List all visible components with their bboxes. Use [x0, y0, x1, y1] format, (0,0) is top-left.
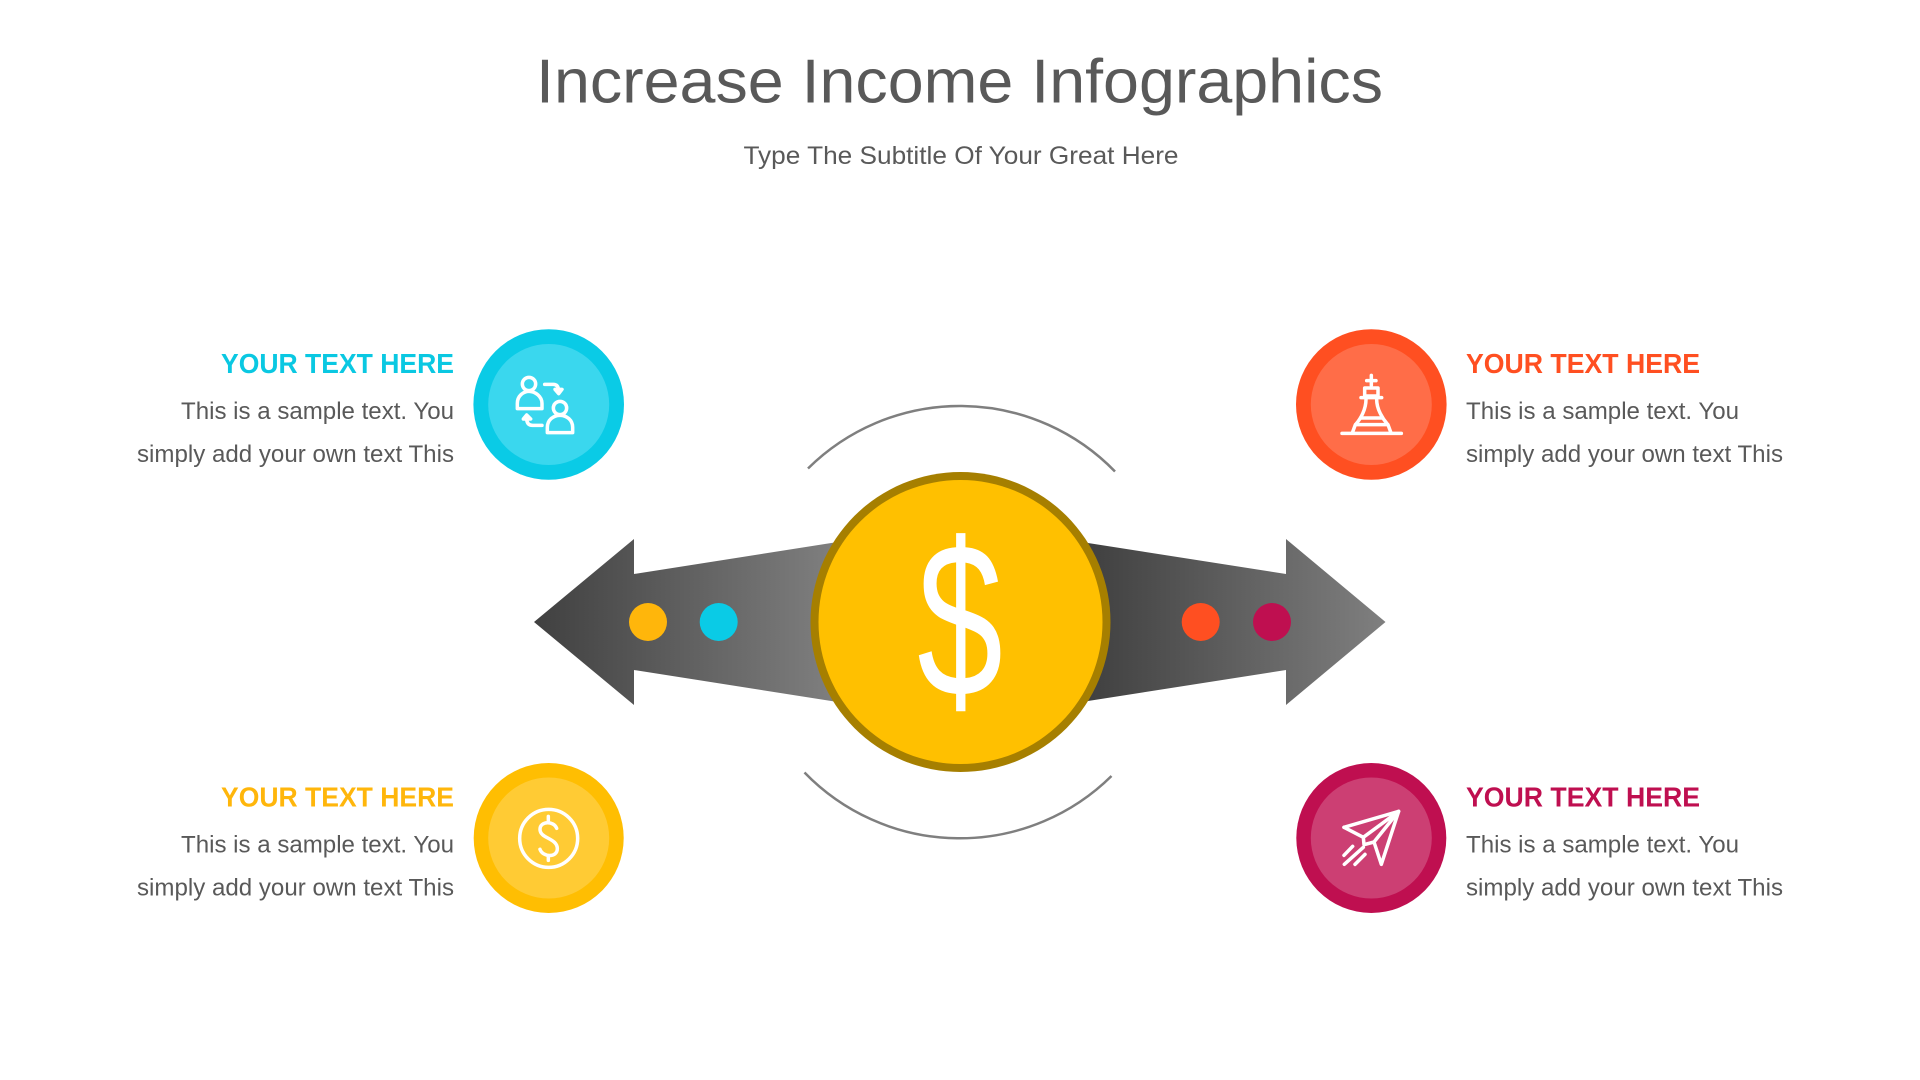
central coin [810, 472, 1110, 772]
heading: YOUR TEXT HERE [221, 348, 454, 379]
body text: simply add your own text This [1466, 874, 1783, 902]
item: bottom right (magenta) [1296, 763, 1783, 913]
body text: This is a sample text. You [181, 832, 454, 858]
subtitle: Type The Subtitle Of Your Great Here [744, 142, 1178, 170]
left arrow [534, 539, 840, 705]
circle badge [1296, 329, 1447, 480]
dot: red [1182, 603, 1220, 641]
heading: YOUR TEXT HERE [1466, 782, 1700, 812]
body text: This is a sample text. You [1466, 832, 1739, 858]
body text: This is a sample text. You [1466, 398, 1739, 425]
circle badge [1296, 763, 1446, 913]
icon: dollar coin [520, 809, 578, 867]
body text: simply add your own text This [1466, 441, 1783, 468]
body text [137, 832, 454, 902]
bottom arc [804, 772, 1112, 838]
title: Increase Income Infographics [536, 48, 1383, 116]
body text: simply add your own text This [137, 874, 454, 902]
heading: YOUR TEXT HERE [221, 782, 454, 812]
icon: chess king [1342, 375, 1401, 433]
icon: paper plane [1344, 811, 1399, 864]
circle badge [474, 763, 624, 913]
circle badge [473, 329, 624, 480]
right arrow [1080, 539, 1386, 705]
dot: cyan [700, 603, 738, 641]
dollar sign: $ [917, 498, 1003, 744]
top arc [808, 406, 1115, 472]
body text [1466, 832, 1783, 902]
body text [1466, 398, 1783, 468]
item: top left (cyan) [137, 329, 624, 480]
dot: orange [629, 603, 667, 641]
body text: simply add your own text This [137, 441, 454, 468]
dot: magenta [1253, 603, 1291, 641]
body text: This is a sample text. You [181, 398, 454, 425]
body text [137, 398, 454, 468]
item: bottom left (yellow) [137, 763, 624, 913]
icon: people exchange [517, 377, 573, 433]
heading: YOUR TEXT HERE [1466, 348, 1700, 379]
item: top right (red) [1296, 329, 1783, 480]
